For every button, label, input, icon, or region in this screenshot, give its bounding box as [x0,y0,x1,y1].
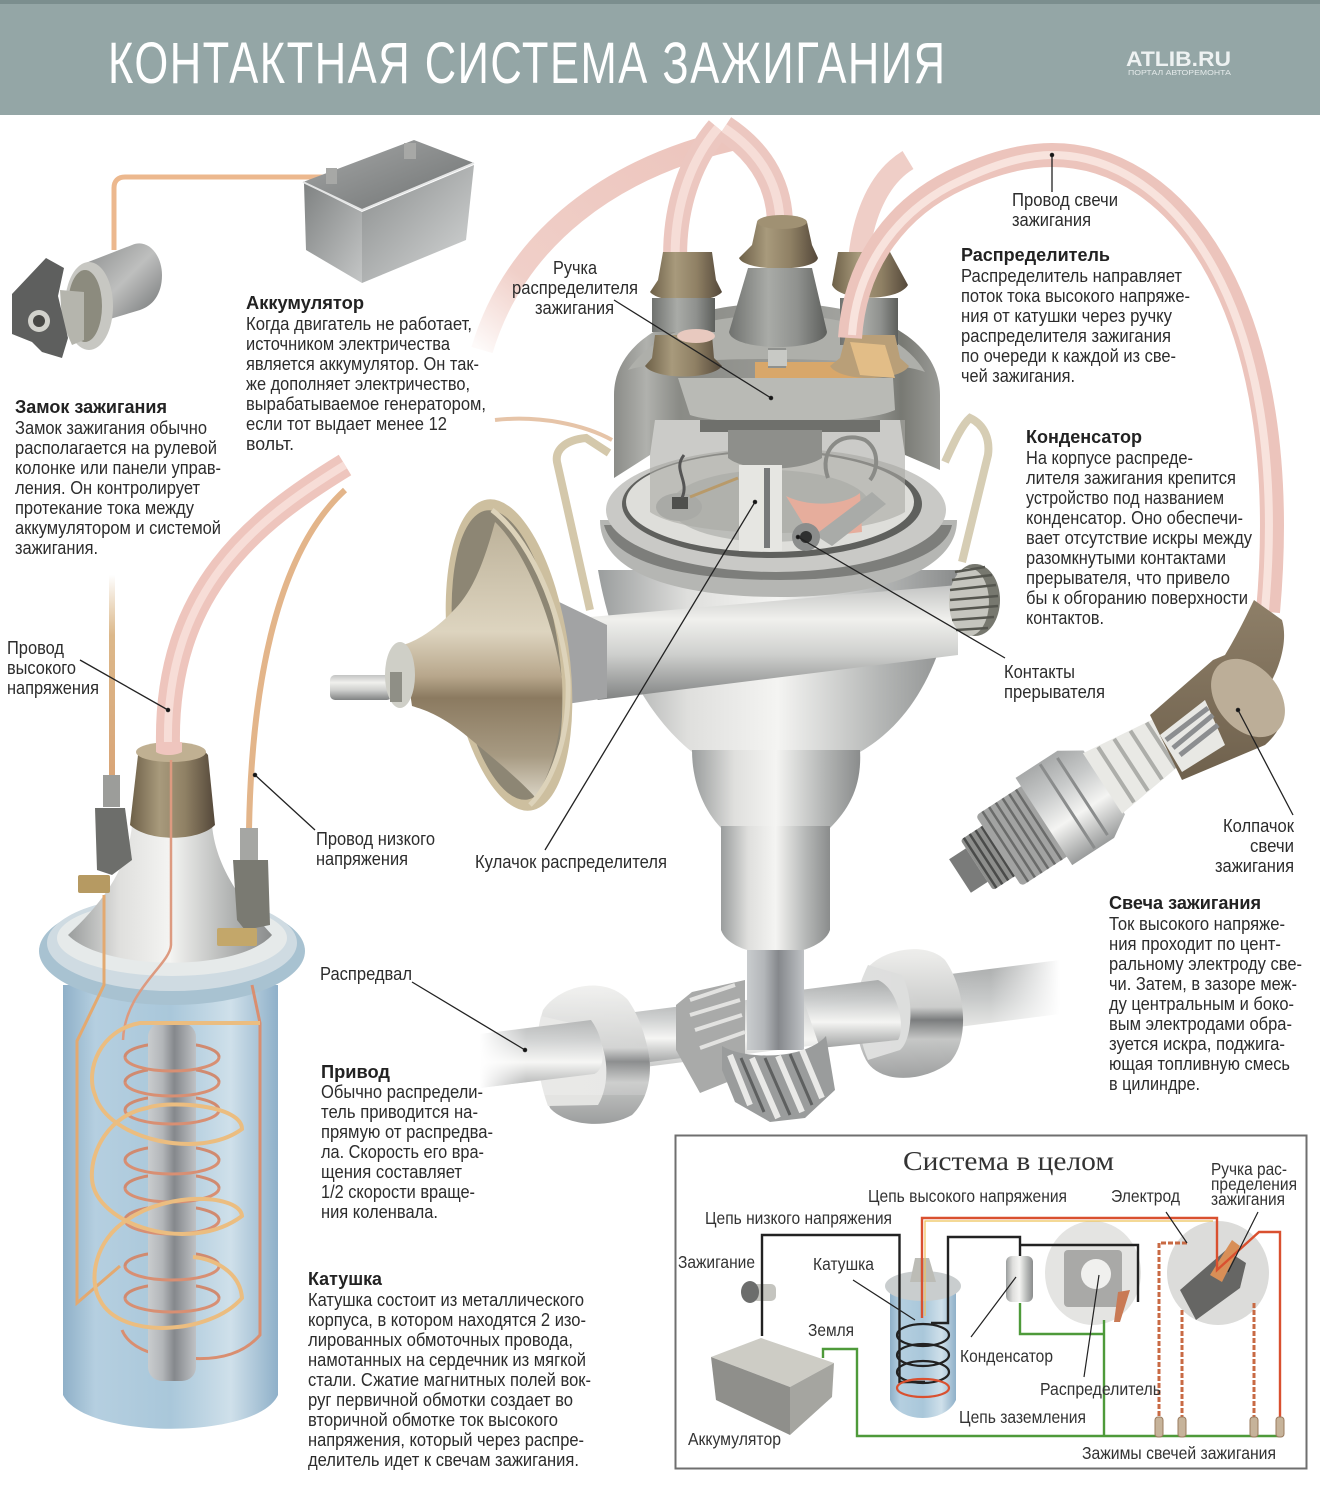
logo: ATLIB.RU [1126,48,1231,71]
header band [0,0,1320,115]
knurled knob [949,564,1000,636]
base cup [600,520,957,597]
clips [557,438,609,610]
text block: катушка: лированных обмоточных провода, [308,1330,573,1350]
text block: замок зажигания: ления. Он контролирует [15,478,200,498]
text block: свеча зажигания: ния проходит по цент- [1109,934,1281,954]
illustration: right wire highlight [852,155,1269,610]
inset labels: Электрод [1111,1186,1180,1206]
mini lock [741,1281,776,1303]
text block: привод: Привод [321,1062,391,1082]
inner helix back [125,1043,219,1298]
text block: аккумулятор [246,293,486,454]
label: провод высокого напряжения: напряжения [7,678,99,698]
text block: свеча зажигания: Ток высокого напряже- [1109,914,1285,934]
wires: ground [823,1303,1280,1436]
text block: катушка [308,1269,591,1470]
illustration: battery [303,140,530,283]
text block: привод: 1/2 скорости враще- [321,1182,475,1202]
spark clamps [1155,1417,1284,1437]
label: распредвал: Распредвал [320,964,412,984]
text block: аккумулятор: является аккумулятор. Он так- [246,354,479,374]
text block: распределитель: ния от катушки через ручку [961,306,1172,326]
text block: конденсатор: Конденсатор [1026,427,1142,447]
text block: катушка: руг первичной обмотки создает во [308,1390,573,1410]
wire: right spark lead [850,155,1272,612]
text block: привод: ла. Скорость его вра- [321,1142,484,1162]
shaft [480,960,1060,1088]
lower body [598,570,958,752]
right terminal [217,828,270,946]
text block: аккумулятор: же дополняет электричество, [246,374,470,394]
outer spiral winding [92,1023,260,1328]
text block: катушка: делитель идет к свечам зажигания. [308,1450,579,1470]
inset labels: Аккумулятор [688,1429,781,1449]
label: провод низкого напряжения: Провод низкого [316,829,435,849]
label: ручка распределителя зажигания [512,258,638,318]
right cam lobe [856,949,963,1078]
iron core [148,1023,196,1381]
text block: катушка: Катушка [308,1269,383,1289]
label: провод свечи зажигания: зажигания [1012,210,1091,230]
inset labels: Земля [808,1320,854,1340]
wires: low voltage [762,1235,1138,1382]
logo: ПОРТАЛ АВТОРЕМОНТА [1128,70,1231,77]
panel heading: Система в целом [903,1146,1114,1176]
cam shaft and contacts [656,437,886,551]
illustration: camshaft and drive gear [480,949,1060,1124]
left terminal [78,775,132,893]
text block: катушка: вторичной обмотке ток высокого [308,1410,558,1430]
text block: замок зажигания: аккумулятором и системой [15,518,221,538]
can body [63,985,278,1429]
inset labels: Цепь низкого напряжения [705,1208,892,1228]
inset labels: Зажигание [678,1252,755,1272]
text block: свеча зажигания: чи. Затем, в зазоре меж- [1109,974,1297,994]
illustration: ignition lock with wire [12,177,325,362]
text block: замок зажигания [15,397,221,558]
text block: распределитель: поток тока высокого напряже- [961,286,1190,306]
text block: аккумулятор: вырабатываемое генератором, [246,394,486,414]
text block: привод: прямую от распредва- [321,1122,493,1142]
inset labels: Катушка [813,1254,874,1274]
label: контакты прерывателя: прерывателя [1004,682,1105,702]
text block: конденсатор: бы к обгоранию поверхности [1026,588,1248,608]
brown insulator [130,742,215,838]
text block: катушка: корпуса, в котором находятся 2 изо- [308,1310,586,1330]
text block: привод: щения составляет [321,1162,462,1182]
cone [68,825,272,963]
inner helix front [125,1057,219,1312]
text block: катушка: Катушка состоит из металлического [308,1290,584,1310]
high voltage wire [168,465,345,745]
text block: распределитель: Распределитель [961,245,1110,265]
side wires [77,760,260,1359]
wires: high voltage [922,1218,1280,1425]
text block: аккумулятор: вольт. [246,434,294,454]
mini capacitor [1006,1256,1033,1302]
wire: left tower [675,128,718,345]
text block: привод: тель приводится на- [321,1102,478,1122]
text block: аккумулятор: если тот выдает менее 12 [246,414,447,434]
label: контакты прерывателя: Контакты [1004,662,1075,682]
text block: замок зажигания: Замок зажигания обычно [15,418,207,438]
text block: привод: ния коленвала. [321,1202,438,1222]
inset labels [678,1159,1297,1463]
text block: аккумулятор: Аккумулятор [246,293,364,313]
inset labels: Цепь заземления [959,1407,1086,1427]
text block: конденсатор: конденсатор. Оно обеспечи- [1026,508,1243,528]
spark plug boot [1150,600,1284,780]
wire: right rear tower [858,160,908,270]
label: ручка распределителя зажигания: Ручка [553,258,598,278]
text block: замок зажигания: протекание тока между [15,498,194,518]
label: провод высокого напряжения [7,638,99,698]
vacuum tube [590,585,958,700]
label: колпачок свечи зажигания: зажигания [1215,856,1294,876]
label: провод низкого напряжения [316,829,435,869]
label: провод свечи зажигания: Провод свечи [1012,190,1118,210]
label: колпачок свечи зажигания [1215,816,1294,876]
text block: свеча зажигания: ющая топливную смесь [1109,1054,1290,1074]
text block: свеча зажигания: ду центральным и боко- [1109,994,1294,1014]
mini coil [885,1258,961,1418]
text block: распределитель: по очереди к каждой из све- [961,346,1176,366]
label: колпачок свечи зажигания: свечи [1250,836,1294,856]
text block: конденсатор: разомкнутыми контактами [1026,548,1226,568]
label: колпачок свечи зажигания: Колпачок [1223,816,1294,836]
illustration: spark plug [932,600,1300,920]
text block: распределитель: Распределитель направляет [961,266,1182,286]
label: провод низкого напряжения: напряжения [316,849,408,869]
inset labels: Распределитель [1040,1379,1161,1399]
text block: привод: Обычно распредели- [321,1082,483,1102]
shaft segments over lobes [480,1020,603,1088]
low voltage wire left [109,575,115,777]
label: ручка распределителя зажигания: зажигания [535,298,614,318]
inset leader lines [853,1212,1258,1377]
inset labels: зажигания [1211,1189,1285,1209]
inset labels: Зажимы свечей зажигания [1082,1443,1276,1463]
wire highlights [675,128,780,345]
thin drive shaft [747,950,804,1050]
mini breaker disc [1045,1221,1141,1325]
title: КОНТАКТНАЯ СИСТЕМА ЗАЖИГАНИЯ [108,31,945,95]
text block: замок зажигания: колонке или панели управ- [15,458,221,478]
text block: конденсатор: вает отсутствие искры между [1026,528,1252,548]
illustration: ignition coil [39,465,345,1429]
text block: конденсатор [1026,427,1252,628]
text block: конденсатор: лителя зажигания крепится [1026,468,1236,488]
coil windings [897,1324,949,1397]
left cam lobe [537,986,650,1124]
text block: свеча зажигания: ральному электроду све- [1109,954,1302,974]
label: провод свечи зажигания [1012,190,1118,230]
mini battery [711,1338,834,1435]
distributor cap [614,303,940,478]
vacuum unit neck [551,600,607,705]
text block: конденсатор: устройство под названием [1026,488,1224,508]
text block: свеча зажигания: вым электродами обра- [1109,1014,1292,1034]
text block: замок зажигания: зажигания. [15,538,98,558]
label: провод высокого напряжения: Провод [7,638,64,658]
rotor arm [678,348,895,468]
cap towers [645,215,909,378]
text block: замок зажигания: располагается на рулевой [15,438,217,458]
inset labels: пределения [1211,1174,1297,1194]
text block: конденсатор: контактов. [1026,608,1104,628]
text block: распределитель: распределителя зажигания [961,326,1171,346]
text block: распределитель [961,245,1190,386]
plug terminal [1160,700,1225,772]
mini distributor disc [1167,1221,1269,1325]
label: провод высокого напряжения: высокого [7,658,76,678]
text block: свеча зажигания [1109,893,1302,1094]
wires: plug leads [1159,1243,1254,1423]
text block: аккумулятор: источником электричества [246,334,451,354]
inset labels: Цепь высокого напряжения [868,1186,1067,1206]
leader lines for main labels [80,153,1293,1052]
low voltage wire right [249,490,345,830]
helical gear [676,980,835,1122]
boot mouth [1196,644,1300,752]
inset labels: Ручка рас- [1211,1159,1287,1179]
flange [39,897,305,1005]
text block: свеча зажигания: в цилиндре. [1109,1074,1200,1094]
text block: конденсатор: прерывателя, что привело [1026,568,1230,588]
inset labels: Конденсатор [960,1346,1053,1366]
label: ручка распределителя зажигания: распределителя [512,278,638,298]
illustration: distributor [330,215,1000,954]
translucent window [650,420,905,533]
text block: катушка: стали. Сжатие магнитных полей вок- [308,1370,591,1390]
vacuum diaphragm [330,491,590,819]
illustration: high voltage wires of the distributor [482,128,908,350]
text block: свеча зажигания: Свеча зажигания [1109,893,1261,913]
text block: свеча зажигания: зуется искра, поджига- [1109,1034,1285,1054]
wire highlight: yellow trace [925,1221,1213,1316]
label: контакты прерывателя [1004,662,1105,702]
text block: замок зажигания: Замок зажигания [15,397,167,417]
wire: long left lead [482,137,745,350]
text block: катушка: намотанных на сердечник из мягкой [308,1350,586,1370]
text block: катушка: напряжения, который через распре- [308,1430,584,1450]
wire highlight [168,465,345,745]
wire: center tower [724,128,780,225]
text block: аккумулятор: Когда двигатель не работает, [246,314,472,334]
text block: привод [321,1062,493,1222]
soft shaft ends [480,955,1060,1095]
panel: система в целом [676,1136,1306,1468]
label: кулачок распределителя: Кулачок распределителя [475,852,667,872]
text block: распределитель: чей зажигания. [961,366,1075,386]
text block: конденсатор: На корпусе распреде- [1026,448,1193,468]
